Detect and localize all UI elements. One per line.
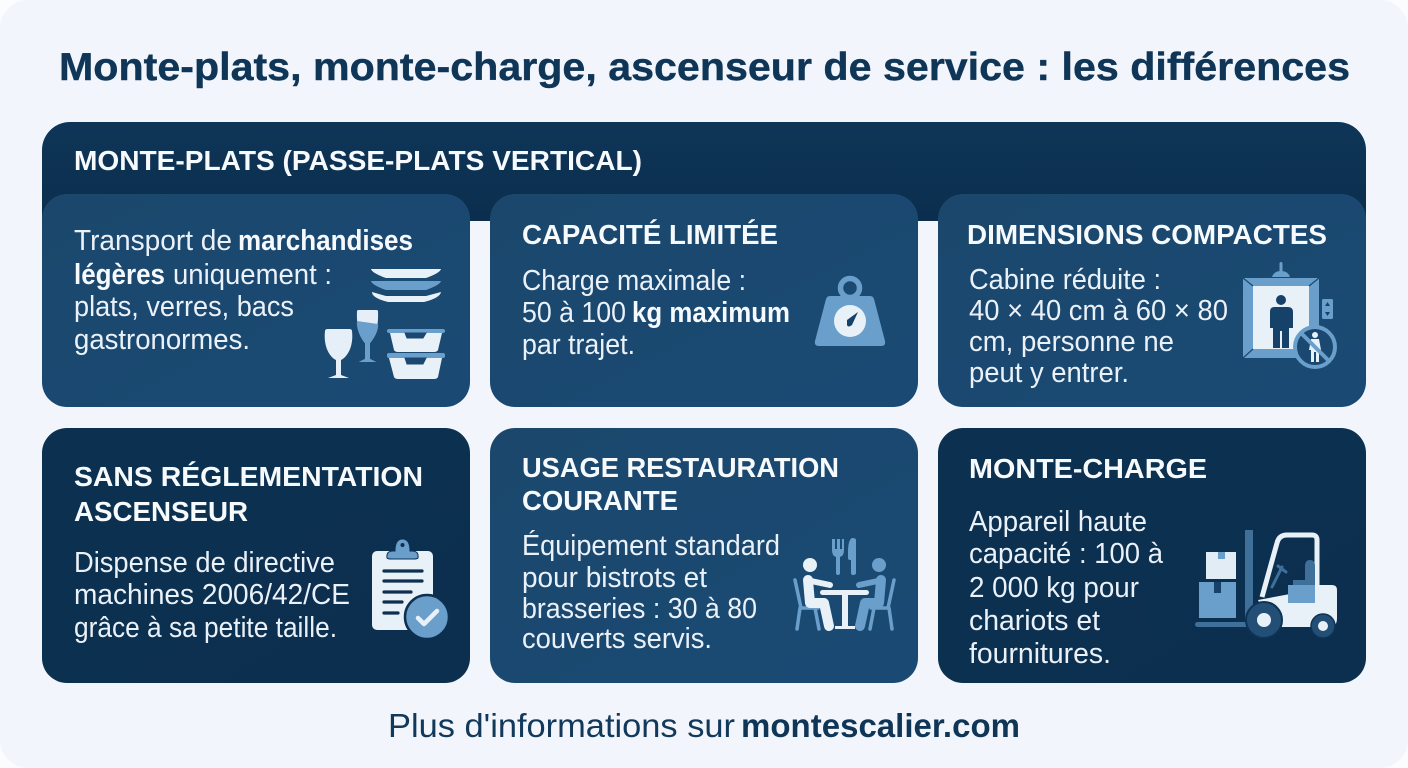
text: cabine réduite: 40 × 40 cm à 60 × 80 xyxy=(969,295,1228,327)
text: description xyxy=(74,225,413,356)
panel: capacité limitée xyxy=(490,194,918,407)
icon: clipboard with check xyxy=(372,539,449,639)
text: cabine réduite: peut y entrer. xyxy=(969,357,1129,389)
heading: sans réglementation ascenseur: SANS RÉGLEMENTATION xyxy=(74,461,423,492)
text: description: uniquement : xyxy=(173,259,332,291)
heading: monte-plats: MONTE-PLATS (PASSE-PLATS VERTICAL) xyxy=(74,145,642,176)
text: description: plats, verres, bacs xyxy=(74,291,294,323)
heading: sans réglementation ascenseur xyxy=(74,461,423,527)
heading: sans réglementation ascenseur: ASCENSEUR xyxy=(74,496,248,527)
text: appareil haute capacité: 2 000 kg pour xyxy=(969,572,1139,604)
panel: monte-plats header band xyxy=(42,122,1366,221)
text: charge maximale: 50 à 100 xyxy=(522,297,626,329)
panel: dimensions compactes xyxy=(938,194,1366,407)
text: directive machines xyxy=(74,547,350,644)
panel: sans réglementation ascenseur xyxy=(42,428,470,683)
footer: montescalier.com xyxy=(741,707,1020,744)
text: charge maximale: Charge maximale : xyxy=(522,265,746,297)
text: équipement standard: brasseries : 30 à 80 xyxy=(522,593,757,625)
heading: usage restauration courante xyxy=(522,452,839,516)
text: appareil haute capacité: Appareil haute xyxy=(969,506,1147,538)
heading: usage restauration courante: USAGE RESTAURATION xyxy=(522,452,839,483)
icon: forklift with boxes xyxy=(1195,530,1337,638)
heading: usage restauration courante: COURANTE xyxy=(522,485,678,516)
text: appareil haute capacité: chariots et xyxy=(969,605,1100,637)
text: directive machines: Dispense de directive xyxy=(74,547,335,579)
heading: capacité limitée: CAPACITÉ LIMITÉE xyxy=(522,219,778,250)
text: cabine réduite: cm, personne ne xyxy=(969,326,1174,358)
text: description: Transport de xyxy=(74,225,232,257)
text: description: légères xyxy=(74,259,165,291)
icon: plates, glasses and containers xyxy=(325,269,445,379)
icon: weight xyxy=(815,278,885,346)
text: cabine réduite: Cabine réduite : xyxy=(969,264,1161,296)
icon: two people dining at a table xyxy=(795,538,894,629)
title: Monte-plats, monte-charge, ascenseur de service : les différences xyxy=(59,46,1350,89)
footer: Plus d'informations sur xyxy=(388,707,735,744)
panel: monte-charge xyxy=(938,428,1366,683)
text: appareil haute capacité: capacité : 100 à xyxy=(969,538,1163,570)
panel: usage restauration courante xyxy=(490,428,918,683)
text: charge maximale: kg maximum xyxy=(632,297,790,329)
text: appareil haute capacité: fournitures. xyxy=(969,638,1111,670)
text: charge maximale xyxy=(522,265,790,361)
footer xyxy=(388,707,1020,744)
text: équipement standard: Équipement standard xyxy=(522,530,780,562)
panel: marchandises légères xyxy=(42,194,470,407)
heading: dimensions compactes: DIMENSIONS COMPACTES xyxy=(967,219,1327,250)
text: cabine réduite xyxy=(969,264,1228,389)
icon: elevator cabin with no-entry sign xyxy=(1243,262,1335,367)
text: description: marchandises xyxy=(238,225,413,257)
heading: monte-charge: MONTE-CHARGE xyxy=(969,453,1207,484)
text: directive machines: grâce à sa petite taille. xyxy=(74,612,337,644)
text: description: gastronormes. xyxy=(74,324,250,356)
text: charge maximale: par trajet. xyxy=(522,329,635,361)
text: directive machines: machines 2006/42/CE xyxy=(74,579,350,611)
text: appareil haute capacité xyxy=(969,506,1163,670)
text: équipement standard: couverts servis. xyxy=(522,623,712,655)
text: équipement standard xyxy=(522,530,780,655)
text: équipement standard: pour bistrots et xyxy=(522,562,707,594)
